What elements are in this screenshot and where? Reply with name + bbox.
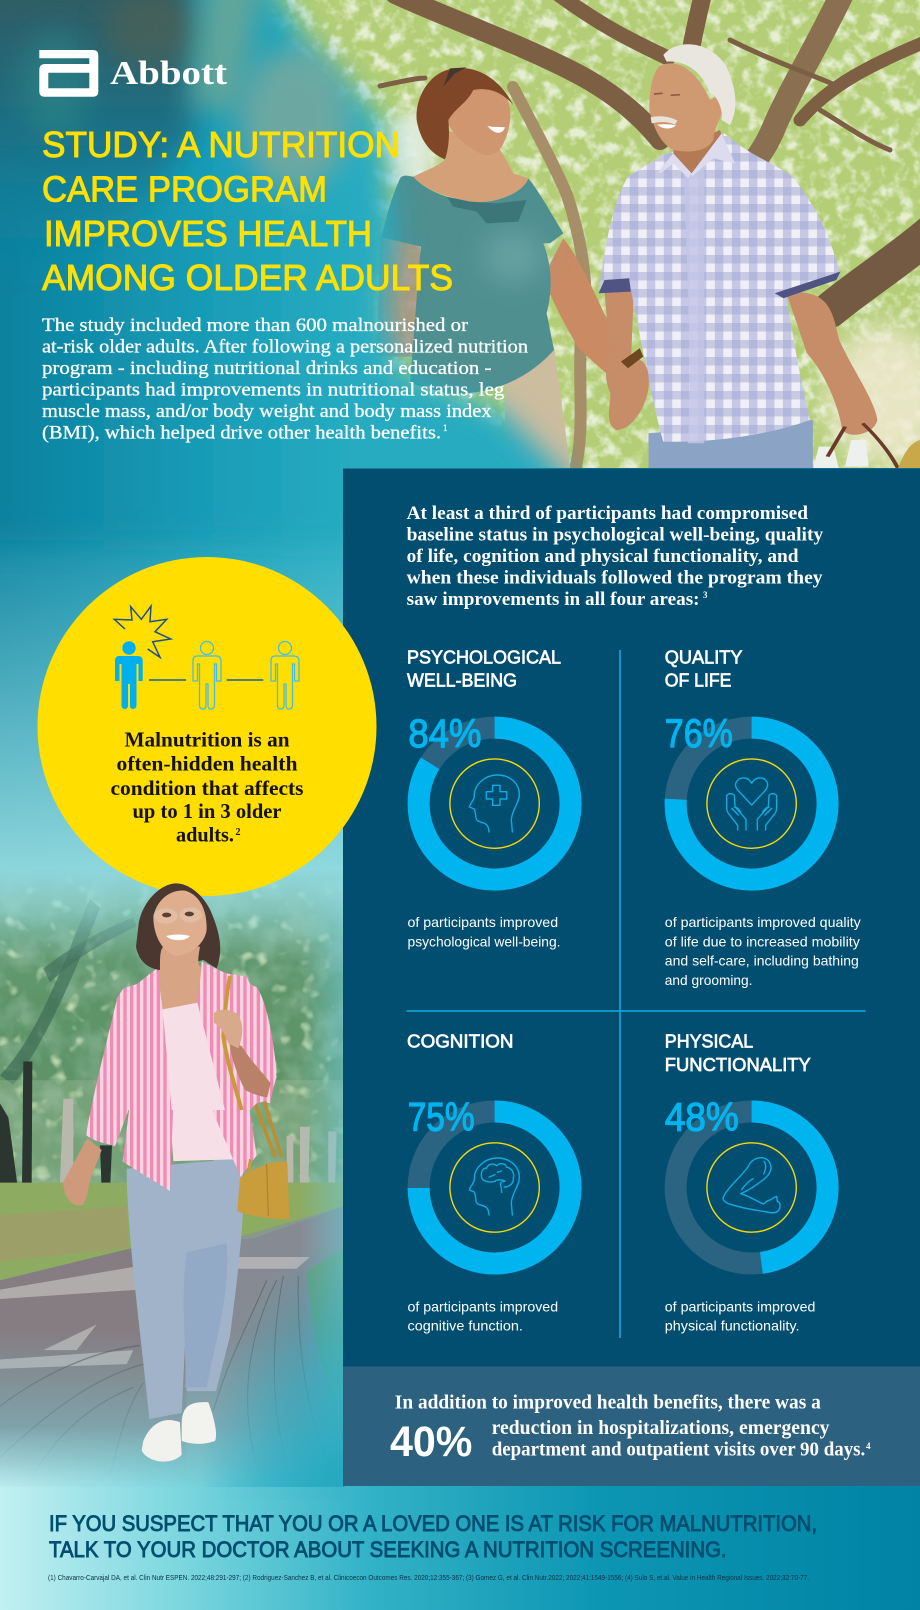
donut chart: 76% bbox=[665, 712, 828, 880]
logo: Abbott bbox=[39, 50, 228, 97]
section: physical functionality: FUNCTIONALITY bbox=[665, 1054, 811, 1075]
section: psychological well-being bbox=[407, 646, 571, 949]
yellow circle callout: up to 1 in 3 older bbox=[132, 799, 282, 823]
section: physical functionality: physical functionality. bbox=[665, 1317, 800, 1333]
section: psychological well-being: PSYCHOLOGICAL bbox=[407, 646, 561, 668]
section: psychological well-being: psychological well-being. bbox=[408, 933, 560, 949]
section: psychological well-being: WELL-BEING bbox=[407, 669, 517, 690]
panel intro text: saw improvements in all four areas: bbox=[407, 589, 700, 610]
intro paragraph: muscle mass, and/or body weight and body mass index bbox=[42, 402, 492, 422]
title: IMPROVES HEALTH bbox=[44, 213, 372, 254]
intro paragraph: 1 bbox=[443, 423, 448, 433]
intro paragraph: at-risk older adults. After following a personalized nutrition bbox=[42, 338, 528, 358]
panel: 40% reduction callout: In addition to improved health benefits, there was a bbox=[395, 1392, 821, 1414]
intro paragraph: participants had improvements in nutritional status, leg bbox=[42, 380, 504, 400]
section: quality of life: of life due to increased mobility bbox=[665, 933, 860, 949]
title: CARE PROGRAM bbox=[42, 168, 327, 210]
icon: head with brain bbox=[469, 1158, 519, 1215]
photo figure: woman walking in the park bbox=[63, 883, 289, 1462]
yellow circle callout: often-hidden health bbox=[116, 752, 298, 776]
section: quality of life bbox=[665, 646, 861, 988]
tree branches bbox=[380, 0, 920, 470]
title: AMONG OLDER ADULTS bbox=[42, 257, 453, 298]
panel: four health outcome areas bbox=[343, 468, 920, 1366]
icon: flexed arm bbox=[723, 1158, 780, 1213]
call to action: IF YOU SUSPECT THAT YOU OR A LOVED ONE IS AT RISK FOR MALNUTRITION, bbox=[49, 1511, 817, 1536]
intro paragraph: program - including nutritional drinks and education - bbox=[42, 359, 491, 379]
footer teal band bbox=[0, 1487, 920, 1610]
section: quality of life: and grooming. bbox=[665, 972, 752, 988]
panel: 40% reduction callout: reduction in hospitalizations, emergency bbox=[492, 1418, 830, 1439]
panel intro text: when these individuals followed the program they bbox=[407, 568, 823, 589]
donut chart: 84%: 84% bbox=[408, 712, 481, 756]
panel: 40% reduction callout: 40% bbox=[390, 1418, 472, 1466]
call to action: TALK TO YOUR DOCTOR ABOUT SEEKING A NUTRITION SCREENING. bbox=[49, 1537, 727, 1562]
donut chart: 75%: 75% bbox=[408, 1095, 475, 1139]
donut chart: 84% bbox=[408, 712, 571, 880]
section: cognition: of participants improved bbox=[408, 1298, 558, 1314]
yellow circle callout: Malnutrition is an bbox=[124, 728, 290, 752]
donut chart: 76%: 76% bbox=[665, 712, 733, 756]
section: physical functionality: PHYSICAL bbox=[665, 1030, 753, 1052]
man in plaid shirt bbox=[599, 133, 920, 470]
photo: couple walking under trees bbox=[259, 0, 920, 468]
title bbox=[42, 124, 453, 298]
section: cognition: cognitive function. bbox=[408, 1317, 523, 1333]
section: cognition: COGNITION bbox=[407, 1030, 514, 1052]
intro paragraph: (BMI), which helped drive other health benefits. bbox=[42, 424, 441, 444]
yellow circle callout: 2 bbox=[236, 827, 240, 838]
intro paragraph bbox=[42, 316, 528, 444]
section: quality of life: OF LIFE bbox=[665, 669, 731, 690]
teal overlay fading across the top photo bbox=[0, 0, 570, 540]
yellow circle callout: adults. bbox=[176, 823, 234, 847]
panel intro text: of life, cognition and physical functionality, and bbox=[407, 546, 799, 567]
section: physical functionality bbox=[665, 1030, 828, 1333]
donut chart: 48% bbox=[665, 1095, 828, 1264]
yellow circle callout bbox=[38, 557, 376, 896]
panel: 40% reduction callout: 4 bbox=[866, 1441, 871, 1451]
photo backdrop: park with path bbox=[0, 870, 345, 1532]
section: quality of life: QUALITY bbox=[665, 646, 742, 668]
panel: 40% reduction callout: department and outpatient visits over 90 days. bbox=[492, 1439, 865, 1460]
logo: Abbott: Abbott bbox=[110, 55, 228, 92]
panel intro text: baseline status in psychological well-being, quality bbox=[407, 525, 824, 546]
panel intro text: 3 bbox=[703, 590, 708, 600]
section: quality of life: and self-care, including bathing bbox=[665, 952, 859, 968]
section: physical functionality: of participants improved bbox=[665, 1298, 815, 1314]
donut chart: 48%: 48% bbox=[665, 1095, 739, 1139]
woman in teal shirt bbox=[377, 67, 627, 470]
icon: hands holding heart bbox=[727, 778, 777, 830]
intro paragraph: The study included more than 600 malnourished or bbox=[42, 316, 468, 336]
panel intro text bbox=[407, 503, 824, 610]
icon: head with medical cross bbox=[469, 775, 519, 832]
section: cognition bbox=[407, 1030, 571, 1333]
call to action bbox=[49, 1511, 817, 1562]
section: psychological well-being: of participants improved bbox=[408, 914, 558, 930]
yellow circle callout: condition that affects bbox=[110, 776, 304, 800]
icon: three people with one highlighted bbox=[114, 606, 299, 709]
section: quality of life: of participants improved quality bbox=[665, 914, 861, 930]
references footnote: (1) Chavarro-Carvajal DA, et al. Clin Nutr ESPEN. 2022;48:291-297; (2) Rodriguez-Sanchez B, et al. Clinicoecon Outcomes Res. 2020;12:355-367; (3) Gomez G, et al. Clin Nutr.2022; 2022;41:1549-1556; (4) Sulo S, et.al. Value in Health Regional Issues. 2022;32:70-77. bbox=[48, 1575, 809, 1582]
panel intro text: At least a third of participants had compromised bbox=[407, 503, 808, 524]
title: STUDY: A NUTRITION bbox=[42, 124, 400, 165]
panel: 40% reduction callout bbox=[343, 1366, 920, 1486]
donut chart: 75% bbox=[408, 1095, 571, 1264]
